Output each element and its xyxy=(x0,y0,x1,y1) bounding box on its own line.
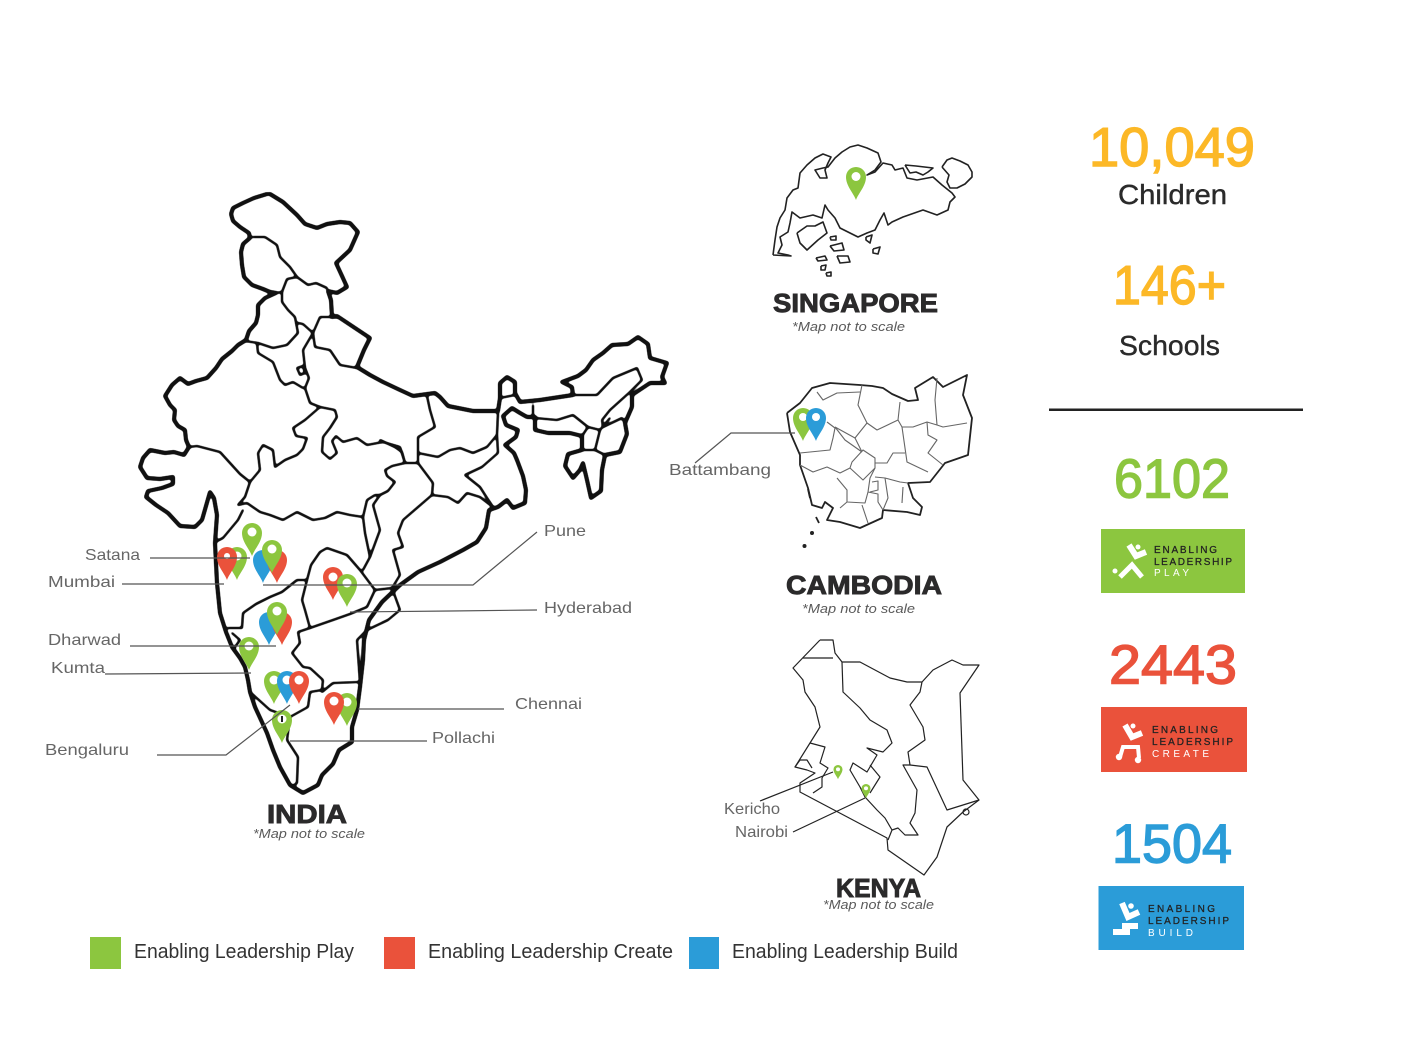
legend: Enabling Leadership Create: Enabling Leadership Create xyxy=(428,941,673,963)
Cambodia title: CAMBODIA xyxy=(786,570,942,600)
logo: Enabling Leadership Build: LEADERSHIP xyxy=(1148,916,1229,927)
stat: children: 10,049 xyxy=(1089,116,1255,178)
legend: Enabling Leadership Create xyxy=(384,937,673,969)
Singapore scale note: *Map not to scale xyxy=(792,319,905,334)
logo: Enabling Leadership Play: ENABLING xyxy=(1154,545,1217,556)
map: Singapore xyxy=(773,145,972,334)
Kenya title: KENYA xyxy=(836,873,921,903)
India city labels: Pune xyxy=(544,523,586,540)
India city labels: Pollachi xyxy=(432,730,495,747)
map: Cambodia xyxy=(669,375,972,616)
stat: Enabling Leadership Create count: 2443 xyxy=(1109,634,1237,696)
India scale note: *Map not to scale xyxy=(253,826,365,841)
logo: Enabling Leadership Play: LEADERSHIP xyxy=(1154,557,1232,568)
legend: Enabling Leadership Build xyxy=(689,937,958,969)
legend xyxy=(90,937,958,969)
Cambodia pins xyxy=(793,408,826,441)
India city labels: Kumta xyxy=(51,660,105,677)
India city labels xyxy=(45,523,632,759)
Cambodia scale note: *Map not to scale xyxy=(802,601,915,616)
logo: Enabling Leadership Play: PLAY xyxy=(1154,568,1189,579)
Singapore pin xyxy=(846,167,866,200)
India title: INDIA xyxy=(267,799,347,829)
stat: schools xyxy=(1113,254,1226,361)
map: India xyxy=(45,194,667,841)
logo: Enabling Leadership Create: CREATE xyxy=(1152,749,1209,760)
India city labels: Mumbai xyxy=(48,574,115,591)
stat: Enabling Leadership Build count: 1504 xyxy=(1112,812,1232,874)
India city labels: Chennai xyxy=(515,696,582,713)
icon: build figure xyxy=(1113,903,1139,935)
logo: Enabling Leadership Play xyxy=(1101,529,1245,593)
logo: Enabling Leadership Build: BUILD xyxy=(1148,928,1193,939)
logo: Enabling Leadership Build xyxy=(1098,886,1244,950)
India pins xyxy=(217,523,357,743)
India city labels: Bengaluru xyxy=(45,742,129,759)
map: Kenya xyxy=(724,640,979,912)
Kenya outline and counties xyxy=(793,640,979,875)
logo: Enabling Leadership Create: LEADERSHIP xyxy=(1152,737,1233,748)
stat: schools: 146+ xyxy=(1113,254,1226,316)
stat: children xyxy=(1089,116,1255,210)
Kericho label: Kericho xyxy=(724,801,780,818)
Singapore outline xyxy=(773,145,972,276)
stat: schools: Schools xyxy=(1119,330,1220,361)
stats divider xyxy=(1049,408,1303,411)
Kenya scale note: *Map not to scale xyxy=(823,897,934,912)
India state boundaries xyxy=(253,237,327,288)
Kericho and Nairobi leader lines xyxy=(760,772,865,832)
stat: children: Children xyxy=(1118,179,1227,210)
legend: Enabling Leadership Build: Enabling Leadership Build xyxy=(732,941,958,963)
Battambang leader line xyxy=(695,433,795,463)
Kenya pins xyxy=(834,765,870,798)
India city labels: Satana xyxy=(85,547,140,564)
stat: Enabling Leadership Play count: 6102 xyxy=(1114,448,1230,510)
logo: Enabling Leadership Create: ENABLING xyxy=(1152,725,1218,736)
icon: play figure xyxy=(1112,544,1146,577)
legend: Enabling Leadership Play xyxy=(90,937,354,969)
India city labels: Hyderabad xyxy=(544,600,632,617)
logo: Enabling Leadership Build: ENABLING xyxy=(1148,904,1215,915)
India outer border xyxy=(140,194,667,793)
Cambodia outline and provinces xyxy=(787,375,972,548)
Singapore title: SINGAPORE xyxy=(773,288,938,318)
legend: Enabling Leadership Play: Enabling Leadership Play xyxy=(134,941,354,963)
Battambang label: Battambang xyxy=(669,462,771,479)
Nairobi label: Nairobi xyxy=(735,824,788,841)
logo: Enabling Leadership Create xyxy=(1101,707,1247,772)
India leader lines xyxy=(105,532,537,755)
India city labels: Dharwad xyxy=(48,632,121,649)
icon: create figure xyxy=(1116,724,1142,763)
